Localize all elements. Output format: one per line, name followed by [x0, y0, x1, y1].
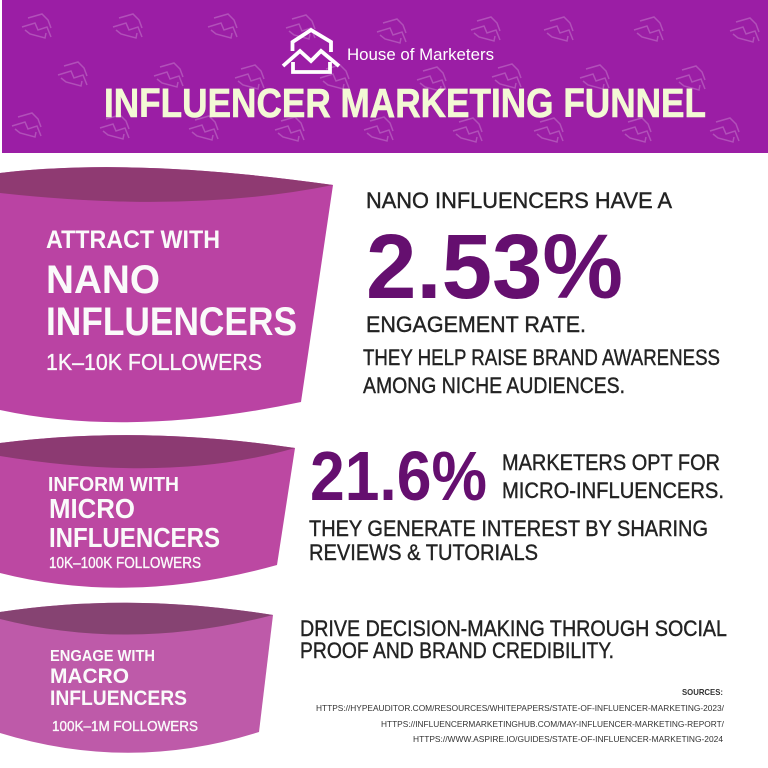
- funnel tier: nano: [0, 167, 333, 422]
- header banner: [2, 0, 768, 153]
- macro name: MACRO: [50, 665, 129, 688]
- icon: house logo: [283, 30, 339, 72]
- micro name: INFLUENCERS: [49, 522, 220, 553]
- nano description: [363, 345, 720, 398]
- macro followers: 100K–1M FOLLOWERS: [52, 719, 198, 735]
- micro stat text: MARKETERS OPT FOR: [502, 450, 720, 475]
- micro description: REVIEWS & TUTORIALS: [309, 540, 538, 565]
- macro name: [50, 665, 187, 710]
- stat: 21.6%: 21.6%: [310, 437, 487, 515]
- sources: SOURCES:: [682, 687, 723, 697]
- sources: HTTPS://HYPEAUDITOR.COM/RESOURCES/WHITEPAPERS/STATE-OF-INFLUENCER-MARKETING-2023/: [316, 703, 725, 713]
- nano followers: 1K–10K FOLLOWERS: [46, 349, 262, 375]
- sources: HTTPS://INFLUENCERMARKETINGHUB.COM/MAY-INFLUENCER-MARKETING-REPORT/: [381, 719, 725, 729]
- sources: [316, 687, 725, 744]
- micro followers: 10K–100K FOLLOWERS: [49, 555, 201, 572]
- nano name: [46, 258, 297, 344]
- nano name: NANO: [46, 258, 160, 302]
- funnel tier: macro: [0, 603, 273, 753]
- micro stat text: MICRO-INFLUENCERS.: [502, 478, 724, 503]
- funnel tier: micro: [0, 435, 295, 588]
- micro stat text: [502, 450, 724, 503]
- micro description: THEY GENERATE INTEREST BY SHARING: [309, 516, 708, 541]
- micro name: MICRO: [49, 493, 135, 524]
- engagement rate text: ENGAGEMENT RATE.: [366, 312, 586, 337]
- stat: 2.53%: 2.53%: [366, 216, 623, 318]
- micro description: [309, 516, 708, 565]
- nano description: AMONG NICHE AUDIENCES.: [363, 373, 625, 398]
- micro name: [49, 493, 220, 553]
- micro heading: INFORM WITH: [48, 474, 179, 496]
- nano intro text: NANO INFLUENCERS HAVE A: [366, 188, 672, 213]
- macro heading: ENGAGE WITH: [50, 648, 155, 665]
- macro name: INFLUENCERS: [50, 687, 187, 710]
- sources: HTTPS://WWW.ASPIRE.IO/GUIDES/STATE-OF-INFLUENCER-MARKETING-2024: [413, 734, 723, 744]
- macro description: PROOF AND BRAND CREDIBILITY.: [300, 638, 614, 663]
- nano heading: ATTRACT WITH: [46, 226, 220, 254]
- macro description: [300, 616, 727, 663]
- brand name: House of Marketers: [347, 45, 494, 64]
- nano name: INFLUENCERS: [46, 300, 297, 344]
